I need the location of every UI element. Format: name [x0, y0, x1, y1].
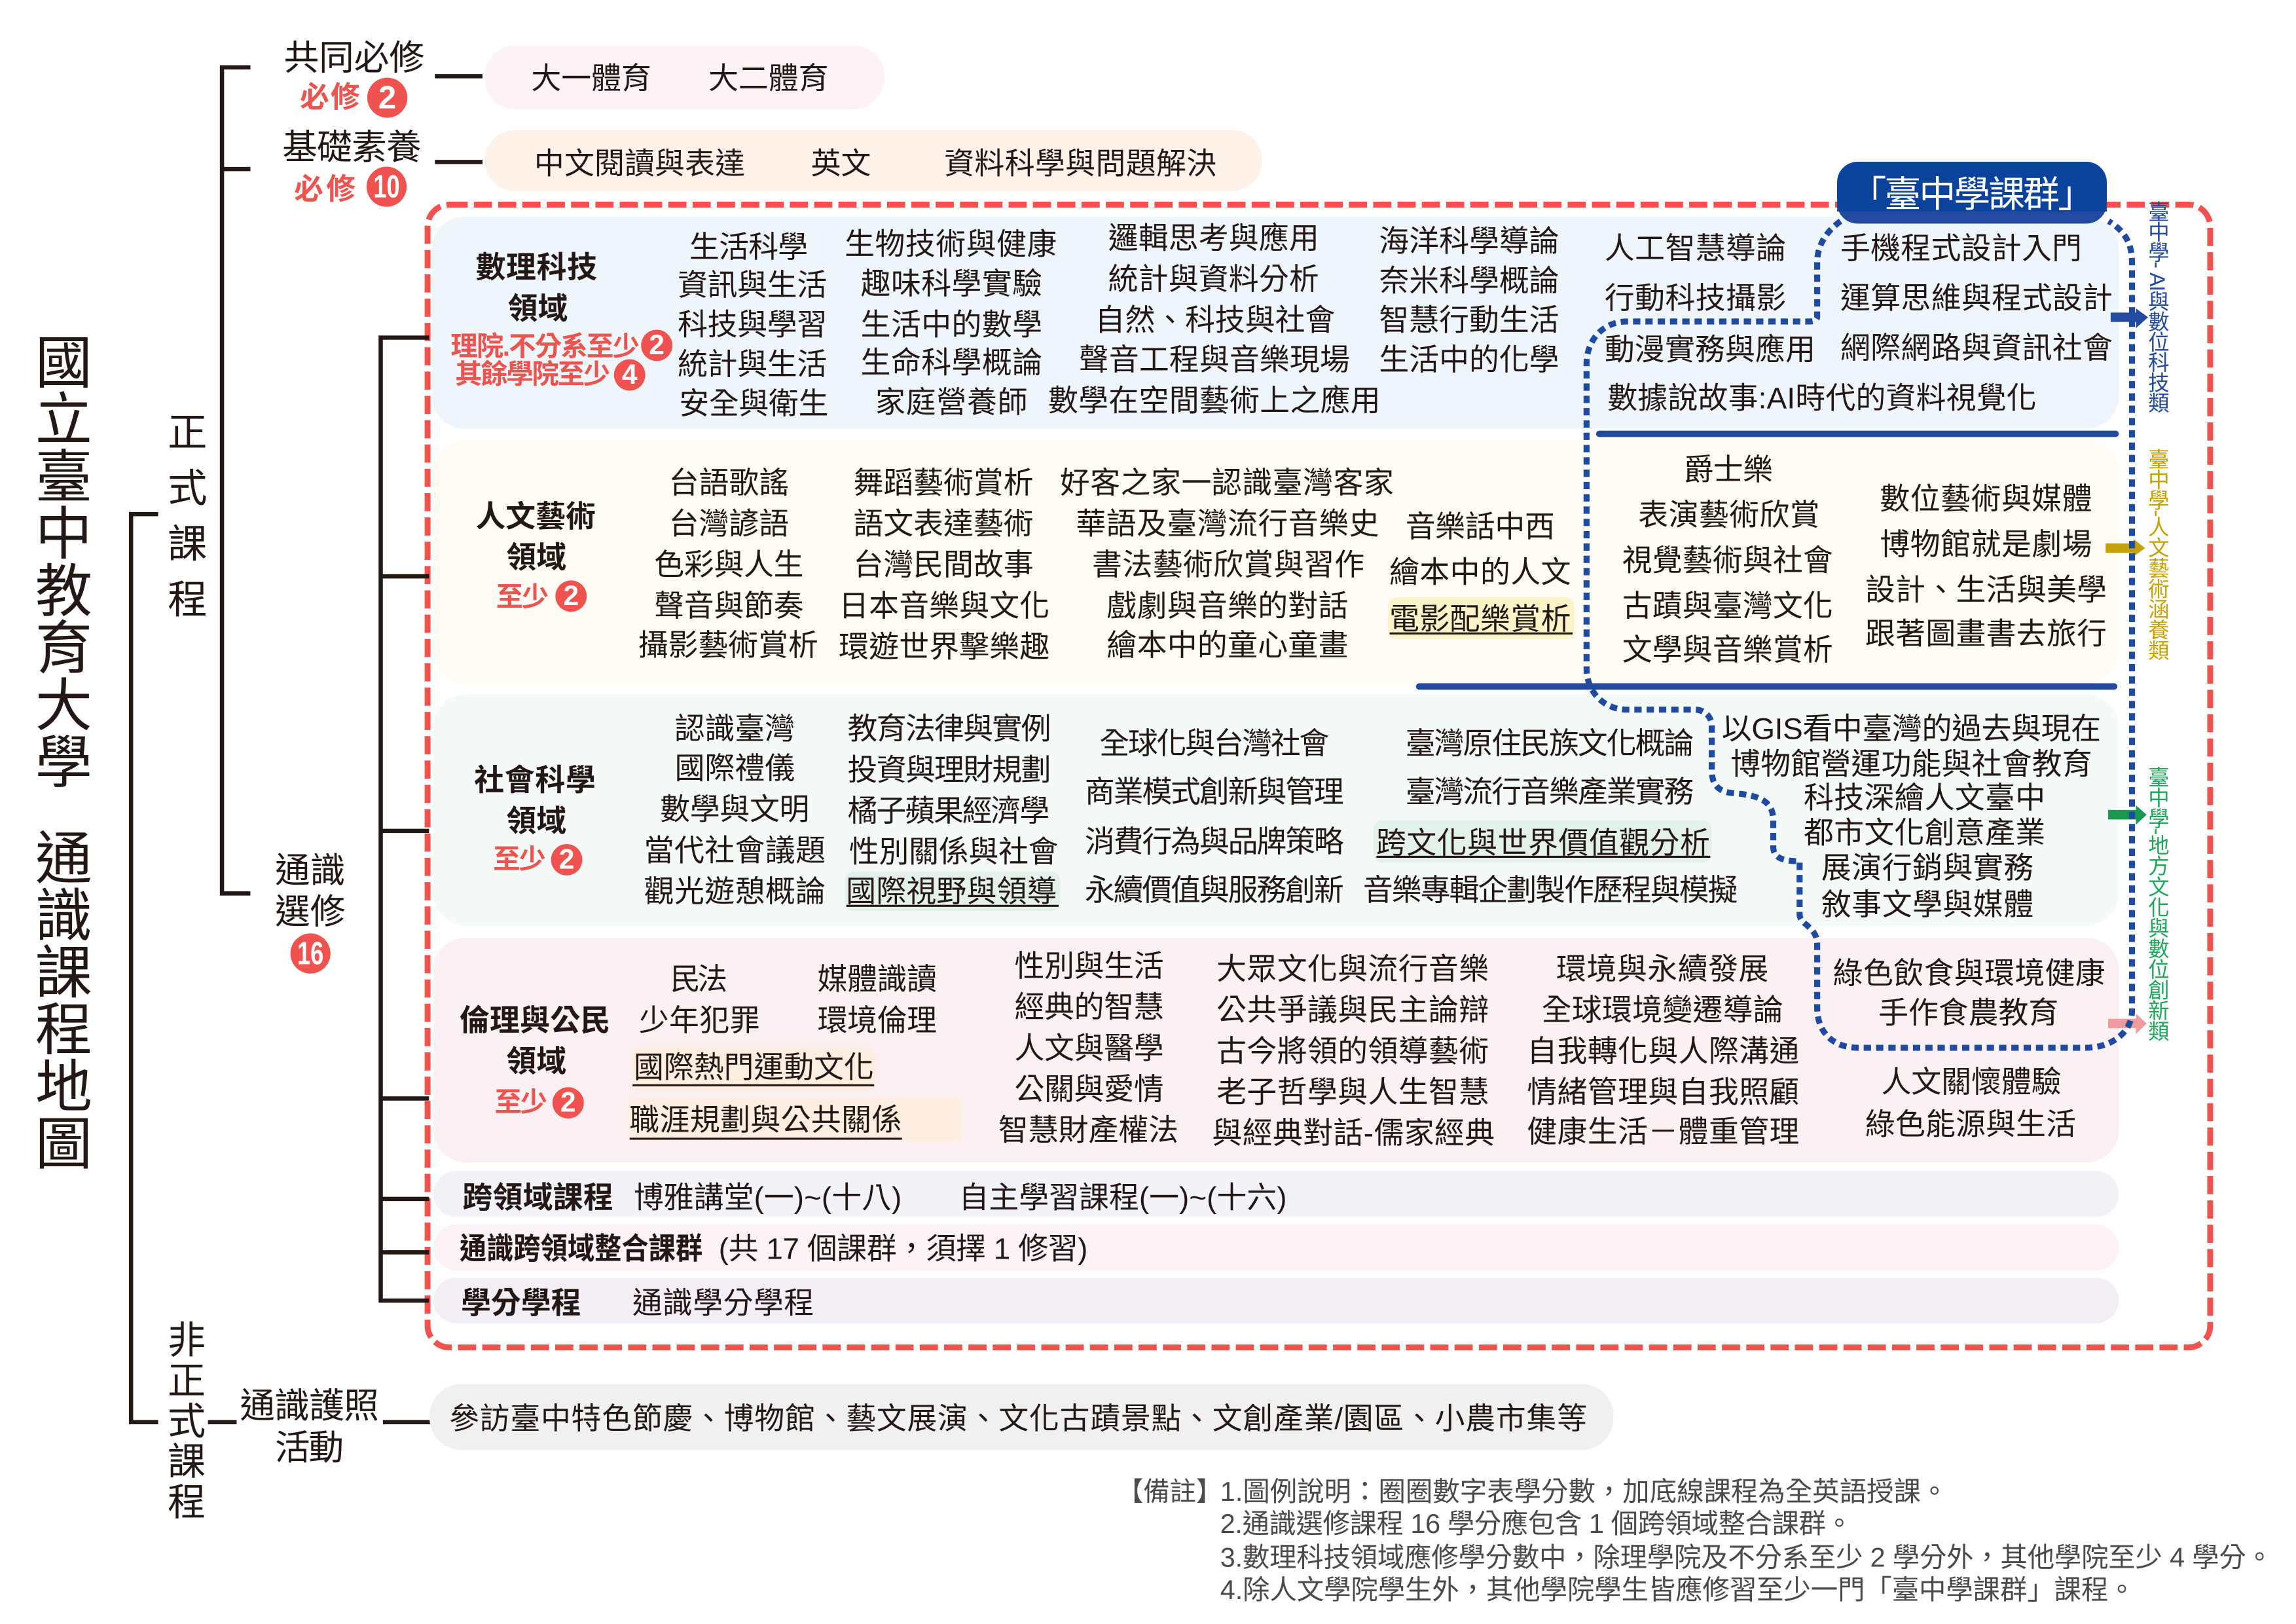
- panel: 人文藝術領域: 古蹟與臺灣文化: [1622, 589, 1833, 623]
- panel: 倫理與公民領域: 少年犯罪: [639, 1003, 759, 1037]
- panel: 人文藝術領域: 日本音樂與文化: [839, 589, 1049, 623]
- tab: 「臺中學課群」: 「臺中學課群」: [1850, 174, 2094, 215]
- panel: 人文藝術領域: 華語及臺灣流行音樂史: [1076, 507, 1379, 541]
- panel: 倫理與公民領域: 環境與永續發展: [1556, 952, 1768, 986]
- panel: 社會科學領域: 都市文化創意產業: [1804, 816, 2045, 850]
- panel: 數理科技領域: 邏輯思考與應用: [1108, 221, 1319, 255]
- arrow: 地方文化類 (green): [2108, 805, 2147, 824]
- panel: 社會科學領域: 臺灣流行音樂產業實務: [1406, 775, 1694, 809]
- panel: 倫理與公民領域: 公共爭議與民主論辯: [1216, 993, 1489, 1027]
- panel: 數理科技領域: 安全與衛生: [679, 386, 828, 420]
- panel: 倫理與公民領域: 手作食農教育: [1878, 996, 2058, 1030]
- panel: 人文藝術領域: 色彩與人生: [654, 547, 803, 581]
- panel: 數理科技領域: 統計與生活: [678, 347, 827, 381]
- panel: 數理科技領域: 智慧行動生活: [1379, 303, 1559, 337]
- bar: 跨領域課程: 博雅講堂(一)~(十八): [634, 1180, 902, 1214]
- panel: 人文藝術領域: 設計、生活與美學: [1865, 572, 2107, 606]
- panel: 倫理與公民領域: 人文與醫學: [1015, 1031, 1164, 1065]
- heading: 社會科學領域: [474, 763, 596, 876]
- panel: 數理科技領域: 聲音工程與音樂現場: [1079, 342, 1350, 377]
- panel: 基礎素養課程: 資料科學與問題解決: [944, 146, 1216, 180]
- panel: 數理科技領域: 統計與資料分析: [1108, 262, 1319, 296]
- heading: 社會科學領域: 領域: [506, 804, 566, 838]
- panel: 人文藝術領域: 舞蹈藝術賞析: [853, 466, 1034, 500]
- panel: 社會科學領域: 教育法律與實例: [848, 712, 1051, 746]
- heading: 數理科技領域: 4: [622, 360, 638, 390]
- notes: 備註: 2.通識選修課程 16 學分應包含 1 個跨領域整合課群。: [1220, 1509, 1853, 1539]
- panel: 人文藝術領域: 書法藝術欣賞與習作: [1092, 547, 1364, 581]
- category: 通識護照活動: 通識護照: [240, 1386, 379, 1426]
- panel: 人文藝術領域: 戲劇與音樂的對話: [1106, 589, 1348, 623]
- category: 共同必修: [283, 38, 424, 118]
- panel: 倫理與公民領域: 全球環境變遷導論: [1542, 993, 1783, 1027]
- category: 基礎素養: 10: [373, 169, 400, 205]
- panel: 社會科學領域: 音樂專輯企劃製作歷程與模擬: [1363, 873, 1738, 907]
- category: 通識護照活動: 活動: [275, 1428, 344, 1467]
- panel: 數理科技領域: 數學在空間藝術上之應用: [1048, 384, 1381, 418]
- heading: 倫理與公民領域: 至少: [495, 1087, 547, 1117]
- panel: 社會科學領域: 性別關係與社會: [849, 835, 1059, 869]
- panel: 社會科學領域: 數學與文明: [660, 792, 809, 826]
- heading: 社會科學領域: 2: [559, 844, 574, 875]
- side label: 地方文化與數位創新類: 臺中學-地方文化與數位創新類: [2145, 766, 2169, 1041]
- panel: 通識護照活動內容: 參訪臺中特色節慶、博物館、藝文展演、文化古蹟景點、文創產業/園區、小農市集等: [449, 1401, 1587, 1435]
- panel: 數理科技領域: 人工智慧導論: [1605, 231, 1786, 265]
- panel: 倫理與公民領域: 大眾文化與流行音樂: [1216, 952, 1489, 986]
- panel: 倫理與公民領域: 公關與愛情: [1015, 1072, 1164, 1106]
- panel: 人文藝術領域: 好客之家一認識臺灣客家: [1060, 466, 1394, 500]
- panel: 倫理與公民領域: 民法: [670, 962, 727, 996]
- panel: 社會科學領域: 國際禮儀: [675, 751, 795, 785]
- panel: 數理科技領域: 自然、科技與社會: [1095, 303, 1335, 337]
- category: 通識選修: 選修: [275, 892, 345, 931]
- panel: 倫理與公民領域: 環境倫理: [818, 1003, 937, 1037]
- heading: 數理科技領域: 領域: [508, 291, 568, 325]
- notes: 備註: 4.除人文學院學生外，其他學院學生皆應修習至少一門「臺中學課群」課程。: [1220, 1575, 2136, 1605]
- panel: 倫理與公民領域: 性別與生活: [1015, 949, 1164, 983]
- panel: 通識護照活動內容: [429, 1384, 1614, 1450]
- panel: 人文藝術領域: 跟著圖畫書去旅行: [1865, 616, 2107, 650]
- panel: 社會科學領域: 認識臺灣: [675, 712, 795, 746]
- heading: 人文藝術領域: 領域: [506, 540, 566, 574]
- heading: 數理科技領域: 數理科技: [475, 250, 597, 284]
- panel: 人文藝術領域: 語文表達藝術: [853, 507, 1034, 541]
- heading: 人文藝術領域: 人文藝術: [475, 499, 596, 533]
- panel: 人文藝術領域: [433, 440, 2119, 683]
- panel: 社會科學領域: 消費行為與品牌策略: [1085, 824, 1344, 858]
- blue dotted outline: 臺中學課群: [1586, 221, 2132, 1048]
- panel: 倫理與公民領域: 自我轉化與人際溝通: [1527, 1034, 1799, 1068]
- panel: 倫理與公民領域: 媒體識讀: [818, 962, 937, 996]
- panel: 基礎素養課程: 中文閱讀與表達: [534, 146, 745, 180]
- heading: 人文藝術領域: [475, 499, 596, 612]
- panel: 倫理與公民領域: 老子哲學與人生智慧: [1216, 1075, 1489, 1109]
- category: 共同必修: 共同必修: [283, 38, 424, 77]
- panel: 社會科學領域: 永續價值與服務創新: [1085, 873, 1344, 907]
- bar: 學分學程: 通識學分學程: [632, 1285, 814, 1320]
- title: 國立臺中教育大學 通識課程地圖: 國立臺中教育大學: [27, 333, 91, 790]
- heading: 社會科學領域: 至少: [493, 844, 546, 874]
- panel: 社會科學領域: 全球化與台灣社會: [1099, 726, 1329, 760]
- highlighted course: 國際視野與領導: 國際視野與領導: [846, 874, 1057, 908]
- panel: 倫理與公民領域: [433, 938, 2119, 1162]
- highlighted course: 職涯規劃與公共關係: 職涯規劃與公共關係: [629, 1103, 902, 1137]
- panel: 社會科學領域: 投資與理財規劃: [848, 752, 1051, 786]
- panel: 數理科技領域: 科技與學習: [678, 307, 827, 341]
- panel: 人文藝術領域: 音樂話中西: [1406, 509, 1555, 544]
- panel: 人文藝術領域: 聲音與節奏: [654, 589, 803, 623]
- highlighted course: 電影配樂賞析: 電影配樂賞析: [1389, 602, 1571, 636]
- red dashed frame: 通識選修範圍: [428, 204, 2210, 1348]
- highlighted course: 職涯規劃與公共關係: [629, 1098, 962, 1141]
- panel: 社會科學領域: 臺灣原住民族文化概論: [1406, 726, 1694, 760]
- panel: 數理科技領域: 家庭營養師: [875, 385, 1028, 419]
- panel: 數理科技領域: 數據說故事:AI時代的資料視覺化: [1607, 380, 2037, 415]
- panel: 人文藝術領域: 繪本中的童心童畫: [1106, 628, 1348, 662]
- heading: 社會科學領域: 社會科學: [474, 763, 596, 797]
- panel: 數理科技領域: 生活中的數學: [861, 307, 1042, 341]
- panel: 數理科技領域: 海洋科學導論: [1379, 224, 1559, 258]
- category: 共同必修: 必修: [300, 81, 360, 113]
- panel: 人文藝術領域: 博物館就是劇場: [1880, 527, 2092, 561]
- panel: 社會科學領域: 展演行銷與實務: [1821, 851, 2033, 885]
- category: 通識護照活動: [240, 1386, 379, 1467]
- bar: 跨領域課程: 自主學習課程(一)~(十六): [959, 1180, 1287, 1214]
- panel: 人文藝術領域: 攝影藝術賞析: [638, 628, 818, 662]
- panel: 共同必修課程: [484, 45, 884, 109]
- category: 通識選修: [275, 851, 345, 974]
- category: 通識選修: 16: [297, 936, 323, 972]
- panel: 倫理與公民領域: 綠色飲食與環境健康: [1833, 956, 2105, 990]
- heading: 人文藝術領域: 2: [563, 581, 579, 612]
- panel: 共同必修課程: 大一體育: [531, 62, 651, 96]
- panel: 數理科技領域: 生物技術與健康: [845, 227, 1057, 261]
- bar: 通識跨領域整合課群: [433, 1225, 2119, 1270]
- panel: 社會科學領域: 當代社會議題: [644, 833, 826, 867]
- heading: 倫理與公民領域: 2: [560, 1088, 576, 1118]
- panel: 數理科技領域: 奈米科學概論: [1379, 263, 1559, 297]
- panel: 數理科技領域: 手機程式設計入門: [1840, 231, 2082, 265]
- bar: 跨領域課程: 跨領域課程: [462, 1180, 613, 1214]
- panel: 社會科學領域: 橘子蘋果經濟學: [848, 794, 1049, 828]
- label: 非正式課程: 非正式課程: [162, 1320, 205, 1522]
- panel: 基礎素養課程: 英文: [811, 146, 871, 180]
- arrow: 數位科技類: [2111, 308, 2148, 328]
- panel: 倫理與公民領域: 綠色能源與生活: [1865, 1107, 2076, 1141]
- heading: 倫理與公民領域: [460, 1003, 610, 1118]
- category: 共同必修: 2: [378, 80, 396, 116]
- tree connector lines: [131, 67, 483, 1422]
- heading: 數理科技領域: 2: [649, 330, 665, 361]
- heading: 倫理與公民領域: 倫理與公民: [460, 1003, 610, 1037]
- panel: 人文藝術領域: 台語歌謠: [669, 466, 789, 500]
- panel: 數理科技領域: 網際網路與資訊社會: [1840, 331, 2113, 365]
- panel: 社會科學領域: 以GIS看中臺灣的過去與現在: [1722, 712, 2101, 746]
- heading: 倫理與公民領域: 領域: [506, 1044, 566, 1078]
- heading: 數理科技領域: 理院.不分系至少: [450, 331, 640, 361]
- panel: 人文藝術領域: 台灣民間故事: [853, 547, 1034, 581]
- notes: 備註: 1.圖例說明：圈圈數字表學分數，加底線課程為全英語授課。: [1220, 1477, 1948, 1507]
- title: 國立臺中教育大學 通識課程地圖: [27, 333, 91, 1171]
- panel: 基礎素養課程: [484, 130, 1262, 191]
- panel: 社會科學領域: 商業模式創新與管理: [1085, 775, 1344, 809]
- bar: 通識跨領域整合課群: (共 17 個課群，須擇 1 修習): [719, 1232, 1087, 1266]
- panel: 數理科技領域: 運算思維與程式設計: [1840, 281, 2113, 315]
- category: 基礎素養: 基礎素養: [282, 128, 422, 167]
- category: 通識選修: 通識: [275, 851, 345, 891]
- panel: 社會科學領域: 科技深繪人文臺中: [1804, 781, 2045, 815]
- panel: 人文藝術領域: 文學與音樂賞析: [1622, 633, 1833, 667]
- panel: 人文藝術領域: 數位藝術與媒體: [1880, 482, 2092, 516]
- panel: 人文藝術領域: 環遊世界擊樂趣: [839, 629, 1049, 663]
- panel: 數理科技領域: 行動科技攝影: [1605, 281, 1786, 315]
- panel: 數理科技領域: 趣味科學實驗: [861, 267, 1042, 301]
- bar: 學分學程: [433, 1278, 2119, 1323]
- panel: 人文藝術領域: 繪本中的人文: [1389, 555, 1571, 589]
- notes: 備註: [1117, 1477, 2273, 1605]
- panel: 人文藝術領域: 台灣諺語: [669, 507, 789, 541]
- tab: 「臺中學課群」: [1837, 162, 2107, 223]
- panel: 人文藝術領域: 表演藝術欣賞: [1638, 498, 1820, 532]
- panel: 社會科學領域: 敘事文學與媒體: [1821, 887, 2033, 921]
- side label: 人文藝術涵養類: 臺中學-人文藝術涵養類: [2145, 448, 2169, 661]
- panel: 倫理與公民領域: 古今將領的領導藝術: [1216, 1034, 1489, 1068]
- category: 基礎素養: [282, 128, 422, 207]
- category: 基礎素養: 必修: [294, 174, 355, 206]
- arrow: 地方文化類 (pink): [2108, 1014, 2147, 1034]
- panel: 倫理與公民領域: 經典的智慧: [1015, 990, 1164, 1024]
- label: 正式課程: 正式課程: [162, 412, 207, 634]
- panel: 人文藝術領域: 視覺藝術與社會: [1622, 544, 1833, 578]
- panel: 倫理與公民領域: 智慧財產權法: [998, 1113, 1178, 1147]
- panel: 數理科技領域: 資訊與生活: [678, 268, 827, 302]
- bar: 跨領域課程: [433, 1171, 2119, 1217]
- divider: 人文藝術 / 社會科學: [1416, 683, 2117, 690]
- panel: 共同必修課程: 大二體育: [708, 62, 828, 96]
- panel: 人文藝術領域: 爵士樂: [1684, 452, 1773, 487]
- panel: 數理科技領域: 生命科學概論: [861, 346, 1042, 380]
- bar: 通識跨領域整合課群: 通識跨領域整合課群: [460, 1232, 702, 1266]
- panel: 倫理與公民領域: 健康生活－體重管理: [1527, 1115, 1799, 1149]
- panel: 社會科學領域: 觀光遊憩概論: [644, 874, 826, 908]
- panel: 倫理與公民領域: 情緒管理與自我照顧: [1527, 1075, 1799, 1109]
- panel: 倫理與公民領域: 與經典對話-儒家經典: [1212, 1116, 1495, 1150]
- heading: 數理科技領域: 其餘學院至少: [455, 359, 610, 389]
- divider: 數理科技 / 人文藝術: [1596, 431, 2119, 437]
- title: 國立臺中教育大學 通識課程地圖: 通識課程地圖: [27, 828, 91, 1171]
- panel: 倫理與公民領域: 人文關懷體驗: [1882, 1065, 2062, 1099]
- panel: 社會科學領域: 博物館營運功能與社會教育: [1730, 747, 2092, 781]
- panel: 社會科學領域: [433, 694, 2119, 925]
- highlighted course: 跨文化與世界價值觀分析: 跨文化與世界價值觀分析: [1376, 826, 1710, 860]
- heading: 人文藝術領域: 至少: [496, 581, 549, 612]
- panel: 數理科技領域: 動漫實務與應用: [1605, 332, 1815, 366]
- bar: 學分學程: 學分學程: [461, 1285, 581, 1320]
- highlighted course: 國際熱門運動文化: 國際熱門運動文化: [634, 1050, 874, 1084]
- panel: 數理科技領域: [432, 217, 2119, 428]
- notes: 備註: 【備註】: [1117, 1477, 1222, 1507]
- heading: 數理科技領域: [450, 250, 672, 391]
- panel: 數理科技領域: 生活科學: [689, 230, 808, 264]
- arrow: 人文藝術涵養類: [2105, 539, 2145, 557]
- side label: AI與數位科技類: 臺中學- AI與數位科技類: [2145, 200, 2169, 413]
- notes: 備註: 3.數理科技領域應修學分數中，除理學院及不分系至少 2 學分外，其他學院至少 4 學分。: [1220, 1543, 2273, 1573]
- panel: 數理科技領域: 生活中的化學: [1379, 342, 1559, 377]
